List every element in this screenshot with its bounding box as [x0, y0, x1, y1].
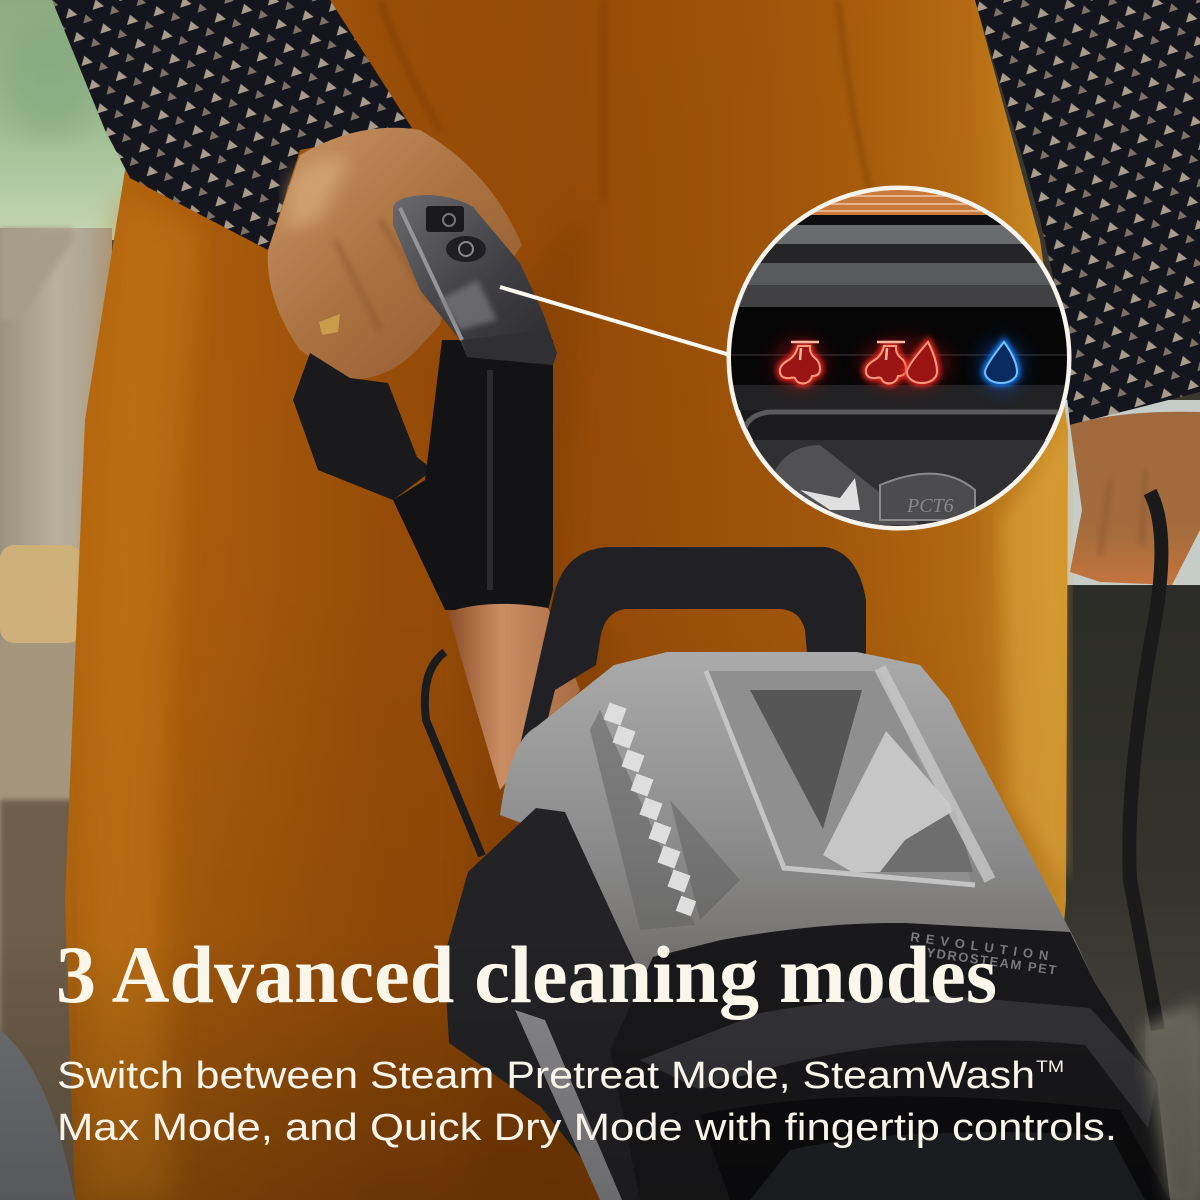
patterned sleeve: right arm [975, 0, 1200, 425]
icon: steamwash max mode (steam and water) [859, 336, 951, 392]
description text: Max Mode, and Quick Dry Mode with fingertip controls. [57, 1107, 1117, 1149]
callout circle: mode indicator panel: PCT6 [906, 495, 954, 517]
tank filter fins [603, 702, 696, 916]
icon: quick dry mode (blue drop) [978, 338, 1026, 394]
right hand holding cord [1070, 412, 1200, 1030]
callout leader line [500, 287, 730, 355]
vacuum clear water tank [500, 652, 1095, 1000]
model label text on body: REVOLUTION [910, 929, 1052, 964]
patterned sleeve: left arm [52, 0, 412, 250]
model label text on body: HYDROSTEAM PET [915, 943, 1057, 978]
description text: TM [1036, 1057, 1064, 1076]
icon: steam pretreat mode [772, 336, 828, 392]
text contrast shade [0, 930, 1200, 1200]
model label text on body [910, 929, 1057, 978]
vacuum handle loop [293, 353, 433, 500]
description text [57, 1055, 1117, 1149]
ring [319, 314, 340, 335]
copper vacuum neck [425, 604, 580, 856]
vacuum dark body and base [444, 808, 1170, 1200]
vacuum control handle [393, 195, 557, 610]
armchair at left [0, 228, 112, 1200]
title: 3 Advanced cleaning modes [56, 929, 997, 1020]
callout circle: mode indicator panel [729, 188, 1070, 530]
left hand gripping handle [268, 128, 522, 379]
control buttons [426, 206, 464, 232]
vacuum carry handle [505, 547, 866, 812]
bottom-right blurred room edge [1140, 1000, 1200, 1200]
description text: Switch between Steam Pretreat Mode, SteamWash [57, 1055, 1035, 1097]
